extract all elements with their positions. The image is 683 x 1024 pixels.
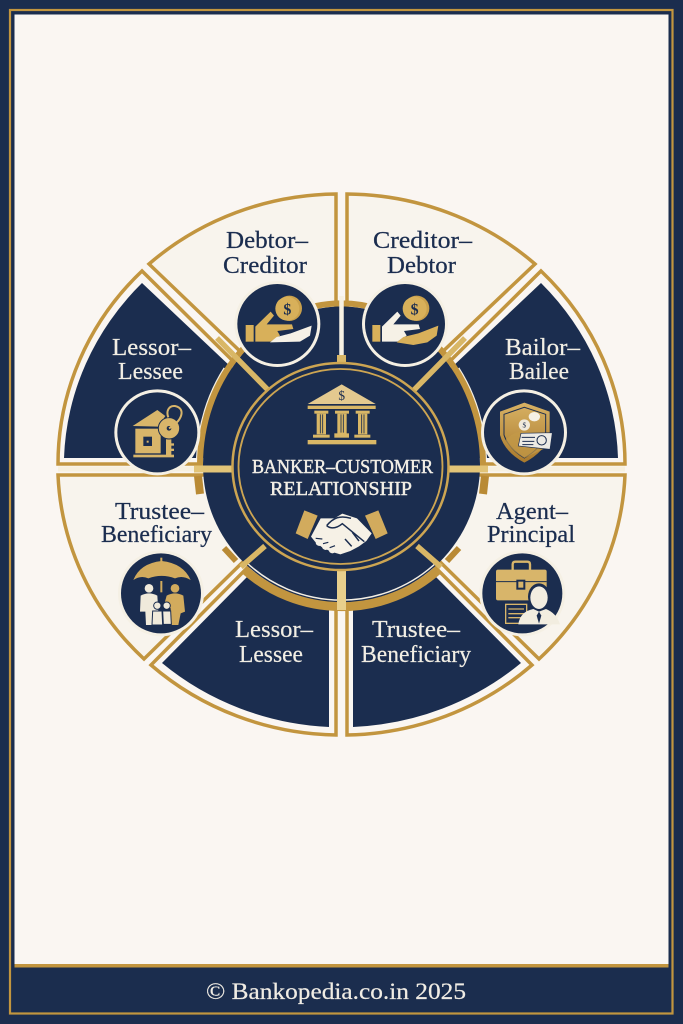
hub title xyxy=(252,457,433,500)
connector spokes xyxy=(58,296,625,610)
middle navy ring xyxy=(197,303,486,607)
segment: Lessor-Lessee bottom panel: Lessor– xyxy=(235,617,314,643)
icon: house and key (Lessor-Lessee) xyxy=(114,389,200,475)
icon: umbrella and family (Trustee-Beneficiary) xyxy=(118,550,204,636)
segment: Trustee-Beneficiary bottom panel: Beneficiary xyxy=(361,642,471,668)
segment: Debtor-Creditor panel xyxy=(149,194,336,356)
segment: Agent-Principal panel: Principal xyxy=(487,522,575,548)
segment: Agent-Principal panel: Agent– xyxy=(496,499,569,525)
icon: shield with money (Bailor-Bailee): $ xyxy=(522,421,526,430)
segment: Bailor-Bailee panel xyxy=(443,271,625,464)
icon: handshake xyxy=(296,510,388,554)
hub title: BANKER–CUSTOMER xyxy=(252,457,433,478)
segment: Lessor-Lessee upper panel xyxy=(58,271,240,464)
segment: Trustee-Beneficiary left panel: Beneficiary xyxy=(101,522,212,548)
centre hub xyxy=(232,363,448,570)
icon: hand receiving coin (Debtor-Creditor) xyxy=(234,281,320,367)
icon: bank building xyxy=(308,384,376,444)
segment: Creditor-Debtor panel xyxy=(347,194,535,356)
segment: Trustee-Beneficiary bottom panel xyxy=(347,565,532,735)
hub title: RELATIONSHIP xyxy=(270,479,412,500)
segment: Trustee-Beneficiary left panel: Trustee– xyxy=(115,499,205,525)
icon: hand receiving coin (Debtor-Creditor): $ xyxy=(283,301,291,318)
icon: shield with money (Bailor-Bailee) xyxy=(481,389,567,475)
icon: hand giving coin (Creditor-Debtor) xyxy=(362,281,448,367)
segment: Creditor-Debtor panel: Debtor xyxy=(387,253,456,279)
segment: Bailor-Bailee panel: Bailor– xyxy=(505,335,581,361)
segment: Trustee-Beneficiary left panel xyxy=(58,475,250,659)
icon: bank building: $ xyxy=(338,388,345,403)
icon: hand giving coin (Creditor-Debtor): $ xyxy=(411,301,419,318)
segment: Agent-Principal panel xyxy=(433,475,625,659)
segment: Lessor-Lessee bottom panel xyxy=(151,565,336,735)
segment: Debtor-Creditor panel: Debtor– xyxy=(226,228,309,254)
segment: Lessor-Lessee upper panel: Lessee xyxy=(118,359,183,385)
segment: Lessor-Lessee bottom panel: Lessee xyxy=(239,642,303,668)
segment: Lessor-Lessee upper panel: Lessor– xyxy=(112,335,192,361)
segment: Creditor-Debtor panel: Creditor– xyxy=(373,228,473,254)
segment: Debtor-Creditor panel: Creditor xyxy=(223,253,307,279)
segment: Trustee-Beneficiary bottom panel: Trustee– xyxy=(372,617,461,643)
segment: Bailor-Bailee panel: Bailee xyxy=(509,359,569,385)
icon: briefcase and agent (Agent-Principal) xyxy=(479,550,565,636)
footer: © Bankopedia.co.in 2025 xyxy=(206,979,466,1004)
